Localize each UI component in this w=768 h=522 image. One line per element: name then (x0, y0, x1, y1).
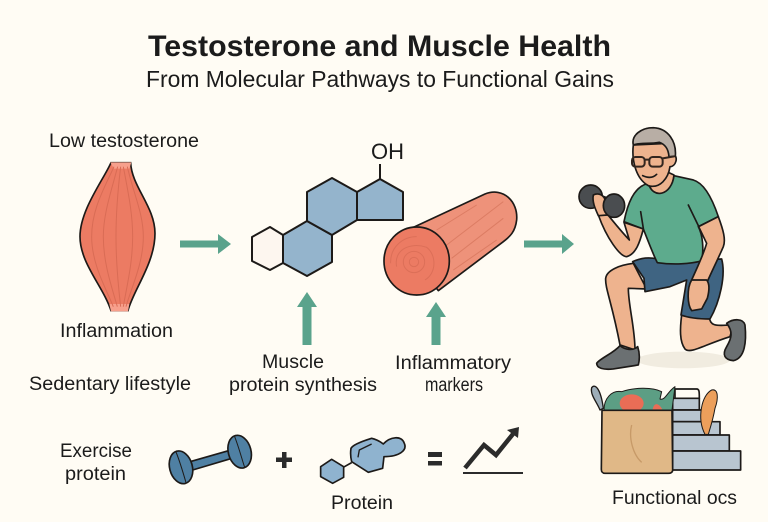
icon: rising trend chart (463, 427, 523, 473)
title: Testosterone and Muscle Health (148, 30, 611, 63)
icon: muscle fiber cylinder (384, 192, 517, 295)
label: OH: OH (371, 139, 404, 164)
label: inflammatory markers (395, 353, 512, 396)
icon: plus sign (276, 452, 292, 468)
arrow: muscle to molecule (180, 234, 231, 254)
icon: muscle (80, 162, 155, 311)
label: low testosterone: Low testosterone (49, 131, 199, 152)
label: inflammatory markers: markers (425, 375, 483, 396)
label: exercise protein: Exercise (60, 441, 132, 462)
label: functional ocs: Functional ocs (612, 488, 737, 509)
arrow: up to molecule (297, 292, 317, 345)
icon: man lifting dumbbell (579, 128, 746, 369)
label: muscle protein synthesis: protein synthesis (229, 375, 377, 396)
subtitle: From Molecular Pathways to Functional Gains (146, 66, 614, 92)
arrow: up to cylinder (426, 302, 446, 345)
label: inflammatory markers: Inflammatory (395, 353, 512, 374)
arrow: cylinder to person (524, 234, 574, 254)
label: muscle protein synthesis: Muscle (262, 352, 324, 373)
label: exercise protein: protein (65, 464, 126, 485)
icon: grocery bag and stairs (591, 386, 741, 473)
label: muscle protein synthesis (229, 352, 377, 396)
icon: protein molecule (321, 438, 405, 483)
icon: equals sign (428, 452, 442, 466)
icon: testosterone molecule (252, 164, 403, 276)
label: sedentary lifestyle: Sedentary lifestyle (29, 374, 191, 395)
icon: blue dumbbell (166, 433, 255, 486)
label: protein: Protein (331, 493, 393, 514)
label: exercise protein (60, 441, 132, 485)
label: inflammation: Inflammation (60, 321, 173, 342)
